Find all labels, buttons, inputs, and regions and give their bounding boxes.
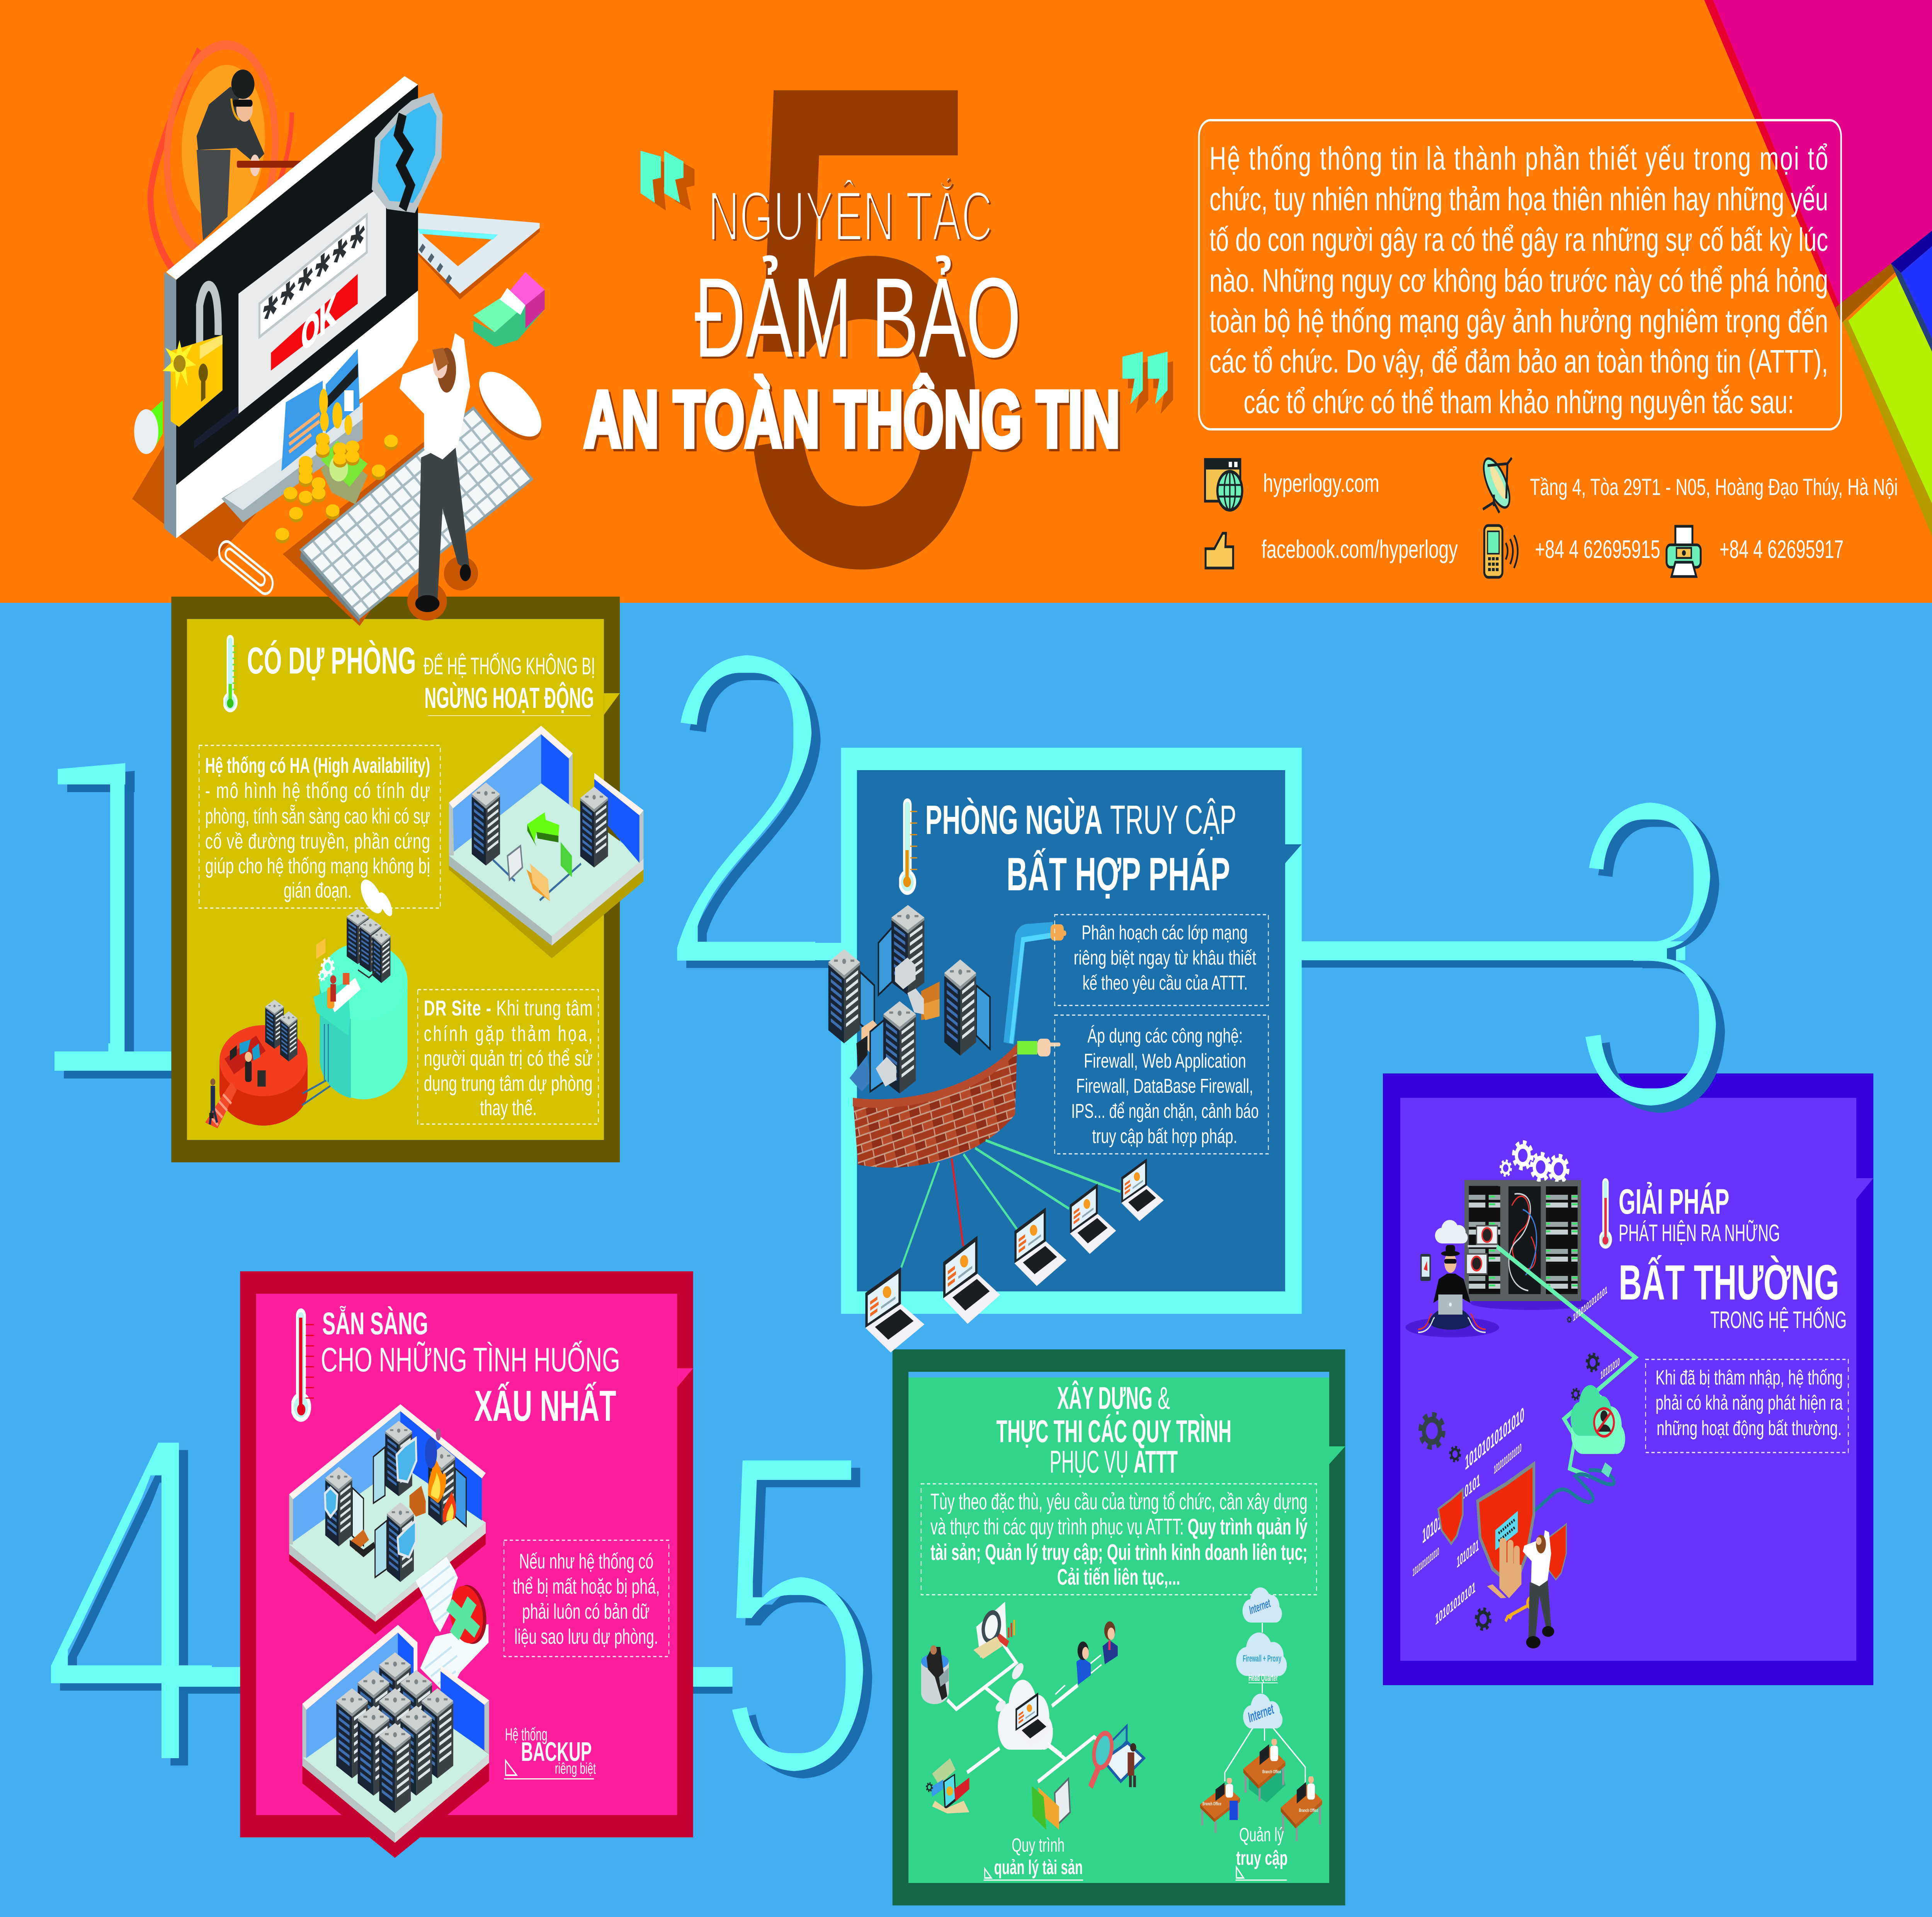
illustration: hacker	[1405, 1220, 1499, 1337]
branch 2: Branch Office	[1299, 1808, 1318, 1813]
label: head quarter: Head Quarter	[1248, 1673, 1278, 1683]
text block: description: Cải tiến liên tục,...	[1057, 1564, 1180, 1590]
title line 2: ĐẢM BẢO	[696, 256, 1023, 383]
thermometer	[1599, 1178, 1612, 1249]
number 4: 4	[38, 1330, 227, 1868]
text block: detection	[1646, 1359, 1848, 1453]
cloud: internet top: Internet	[1248, 1596, 1271, 1617]
heading	[321, 1306, 620, 1430]
network lines	[947, 1636, 1105, 1782]
illustration: connection line with cloud	[1497, 1247, 1635, 1526]
text block: HA: Hệ thống có HA (High Availability)	[205, 754, 430, 778]
header illustration: computer, hacker and worried man	[132, 35, 549, 626]
text block: network partition: Phân hoạch các lớp mạng	[1082, 921, 1248, 944]
icon: thumbs up	[1206, 533, 1233, 568]
heading: CÓ DỰ PHÒNG	[247, 640, 416, 682]
illustration: stairs with medical cross	[415, 1557, 492, 1689]
panel frame	[1383, 1073, 1873, 1685]
label: backup	[504, 1725, 596, 1779]
heading: PHÁT HIỆN RA NHỮNG	[1619, 1220, 1780, 1247]
shadows	[132, 340, 479, 626]
binary text	[1413, 1284, 1620, 1628]
binary text: 1010101010101	[1573, 1284, 1607, 1324]
thermometer	[898, 798, 917, 895]
illustration: laptops	[865, 1158, 1164, 1352]
shield left	[1438, 1489, 1463, 1544]
binary text: 10101	[1422, 1509, 1442, 1548]
label: access management	[1236, 1824, 1287, 1881]
illustration: shields and man	[1438, 1464, 1566, 1648]
text block: network partition: riêng biệt ngay từ khâu thiết	[1074, 946, 1257, 969]
illustration: server room on fire	[289, 1404, 486, 1635]
desk	[350, 1529, 369, 1551]
number 1	[54, 763, 172, 1078]
number 1: 1	[27, 666, 213, 1187]
text block: technologies: truy cập bất hợp pháp.	[1092, 1125, 1237, 1148]
illustration: hands	[1009, 924, 1066, 1056]
title line 2: ĐẢM BẢO	[694, 254, 1021, 381]
branch 1	[1200, 1777, 1240, 1833]
text block: HA: gián đoạn.	[284, 878, 352, 903]
heading: GIẢI PHÁP	[1619, 1182, 1729, 1221]
illustration: asset management network	[921, 1602, 1144, 1830]
heading: XẤU NHẤT	[474, 1382, 616, 1430]
text block: description: tài sản; Quản lý truy cập; Qui trình kinh doanh liên tục;	[930, 1539, 1308, 1565]
number 3: 3	[1567, 702, 1735, 1205]
text block: DR Site: chính gặp thảm họa,	[424, 1022, 593, 1046]
heading: SẴN SÀNG	[322, 1306, 428, 1341]
icon: web	[1205, 459, 1242, 510]
monitor: OK	[301, 286, 336, 361]
text block: HA: phòng, tính sẵn sàng cao khi có sự	[205, 804, 430, 828]
binary text: 10101010101010	[1465, 1402, 1524, 1475]
text block: description: Quy trình quản lý	[1188, 1514, 1308, 1539]
label: asset management: quản lý tài sản	[994, 1856, 1083, 1879]
panel frame	[893, 1349, 1345, 1905]
branch 1: Branch Office	[1202, 1802, 1221, 1806]
pencil	[134, 400, 163, 454]
heading: BẤT THƯỜNG	[1619, 1255, 1839, 1310]
ruler triangle	[418, 213, 540, 299]
heading: PHỤC VỤ	[1050, 1444, 1128, 1480]
text block: HA	[199, 745, 440, 908]
text block: notice: phải luôn có bản dữ	[522, 1600, 650, 1624]
text block: notice	[504, 1540, 669, 1657]
quote mark left	[641, 151, 694, 211]
binary text: 10101010	[1600, 1355, 1620, 1382]
connector 4 to 5	[691, 1667, 733, 1694]
binary text: 10101010101	[1435, 1578, 1475, 1628]
title line 1: NGUYÊN TẮC	[708, 177, 993, 255]
persons	[1048, 1621, 1118, 1754]
text block: detection: những hoạt động bất thường.	[1656, 1417, 1842, 1440]
intro text box	[1199, 120, 1841, 429]
cards and money	[281, 349, 367, 504]
text: fax number: +84 4 62695917	[1719, 535, 1844, 564]
illustration: gears	[1420, 1317, 1599, 1629]
text block: DR Site	[418, 990, 599, 1124]
binary text: 10101010101010	[1413, 1545, 1439, 1579]
heading: CHO NHỮNG TÌNH HUỐNG	[321, 1341, 620, 1379]
text: facebook: facebook.com/hyperlogy	[1262, 535, 1458, 564]
payment cluster	[926, 1758, 969, 1813]
header band	[0, 0, 1932, 603]
login card	[1495, 1511, 1518, 1550]
chart and magnifier	[973, 1602, 1015, 1659]
text block: HA: giúp cho hệ thống mạng không bị	[205, 854, 430, 878]
illustration: access management network	[1200, 1587, 1322, 1841]
thermometer	[291, 1308, 314, 1422]
number 1: 1	[18, 658, 203, 1179]
cloud: firewall	[1236, 1633, 1287, 1676]
heading: &	[1158, 1381, 1170, 1416]
text: address: Tầng 4, Tòa 29T1 - N05, Hoàng Đạo Thúy, Hà Nội	[1530, 475, 1898, 500]
intro text box: các tổ chức. Do vậy, để đảm bảo an toàn thông tin (ATTT),	[1209, 344, 1828, 379]
heading	[996, 1380, 1231, 1480]
hacker portal rings	[151, 35, 292, 268]
number 2: 2	[655, 552, 837, 1066]
illustration: brick wall firewall	[853, 1043, 1017, 1168]
intro text box: toàn bộ hệ thống mạng gây ảnh hưởng nghiêm trọng đến	[1209, 303, 1828, 339]
heading: ĐỂ HỆ THỐNG KHÔNG BỊ	[423, 653, 595, 680]
number 4: 4	[47, 1338, 236, 1875]
label: head quarter	[1248, 1673, 1278, 1683]
worried man	[400, 333, 478, 621]
label: asset management	[984, 1835, 1083, 1881]
man on cylinder	[921, 1645, 949, 1704]
branch 3: Branch Office	[1262, 1770, 1281, 1774]
illustration: isometric room with two racks	[449, 726, 643, 958]
shield	[372, 93, 442, 213]
mint cylinder	[313, 909, 408, 1099]
branch 2	[1281, 1776, 1322, 1841]
man	[1523, 1530, 1554, 1648]
panel frame	[171, 597, 620, 1162]
text block: DR Site: thay thế.	[480, 1096, 537, 1120]
eraser	[473, 272, 545, 347]
text block: technologies: IPS... để ngăn chặn, cảnh báo	[1071, 1100, 1259, 1123]
intro text box: Hệ thống thông tin là thành phần thiết yếu trong mọi tổ	[1209, 141, 1828, 177]
text block: detection: phải có khả năng phát hiện ra	[1655, 1391, 1843, 1414]
panel frame	[841, 748, 1302, 1314]
intro text box: nào. Những nguy cơ không báo trước này có thể phá hỏng	[1209, 263, 1828, 299]
panel 3: anomaly detection	[1383, 1073, 1873, 1685]
illustration: backup room	[302, 1625, 489, 1858]
illustration: server cabinet	[1464, 1142, 1592, 1310]
hand	[1487, 1538, 1521, 1598]
text block: description: và thực thi các quy trình phục vụ ATTT:	[930, 1514, 1184, 1539]
panel 2: illegal access prevention	[828, 748, 1302, 1352]
paper clip	[216, 538, 276, 597]
text block: technologies: Áp dụng các công nghệ:	[1087, 1024, 1243, 1047]
title line 1: NGUYÊN TẮC	[710, 179, 994, 257]
number 5: 5	[721, 1359, 890, 1881]
heading: NGỪNG HOẠT ĐỘNG	[424, 682, 594, 714]
connector 2 to 3	[1300, 941, 1685, 968]
title line 3: AN TOÀN THÔNG TIN	[586, 377, 1122, 466]
cloud: internet top	[1243, 1587, 1282, 1623]
label: asset management: Quy trình	[1012, 1835, 1065, 1856]
magnifier and laptop	[1090, 1723, 1144, 1787]
text block: HA: - mô hình hệ thống có tính dự	[205, 779, 430, 803]
binary text: 10101010101010	[1494, 1441, 1521, 1477]
heading	[925, 797, 1236, 900]
heading: PHÒNG NGỪA	[925, 797, 1102, 843]
flames	[425, 1428, 456, 1522]
text block: HA: cố về đường truyền, phần cứng	[205, 829, 430, 854]
coins	[276, 389, 398, 543]
illustration: server racks	[828, 905, 990, 1094]
heading	[247, 640, 595, 716]
monitor stand	[221, 402, 363, 522]
mouse	[472, 359, 549, 453]
text block: notice: thể bị mất hoặc bị phá,	[513, 1575, 660, 1599]
number 5: 5	[713, 1352, 881, 1874]
text block: detection: Khi đã bị thâm nhập, hệ thống	[1655, 1366, 1843, 1389]
intro text box: tố do con người gây ra có thể gây ra những sự cố bất kỳ lúc	[1209, 222, 1828, 258]
thermometer	[223, 635, 238, 712]
text block: DR Site: người quản trị có thể sử	[424, 1046, 593, 1071]
contact info	[1205, 453, 1898, 577]
folder	[1032, 1779, 1070, 1830]
illustration: connection lines	[901, 1140, 1121, 1267]
label: access management: Quản lý	[1239, 1824, 1284, 1846]
text block: DR Site: dụng trung tâm dự phòng	[424, 1072, 593, 1096]
label: backup: riêng biệt	[555, 1760, 596, 1777]
text block: notice: Nếu như hệ thống có	[519, 1550, 653, 1573]
heading: THỰC THI CÁC QUY TRÌNH	[996, 1414, 1231, 1449]
key	[1505, 1598, 1535, 1621]
monitor	[164, 76, 418, 538]
branch 3	[1243, 1738, 1286, 1803]
branch offices	[1200, 1738, 1322, 1841]
panel frame	[240, 1271, 693, 1837]
title	[584, 151, 1173, 466]
text block: technologies: Firewall, DataBase Firewall,	[1076, 1075, 1253, 1097]
boxes	[410, 1486, 426, 1517]
cloud: firewall: Firewall + Proxy	[1243, 1653, 1281, 1664]
shield right	[1545, 1524, 1566, 1580]
binary text: 10101	[1461, 1470, 1480, 1505]
heading: BẤT HỢP PHÁP	[1007, 847, 1230, 900]
text block: technologies	[1054, 1015, 1268, 1154]
shields	[325, 1438, 417, 1557]
icon: printer	[1667, 526, 1701, 577]
text: phone number: +84 4 62695915	[1535, 535, 1660, 564]
text block: network partition	[1054, 915, 1268, 1005]
heading	[1619, 1182, 1847, 1334]
padlock	[162, 286, 223, 427]
intro text box: các tổ chức có thể tham khảo những nguyên tắc sau:	[1243, 384, 1794, 420]
text block: technologies: Firewall, Web Application	[1084, 1050, 1246, 1072]
text: website: hyperlogy.com	[1263, 469, 1379, 498]
text block: description: Tùy theo đặc thù, yêu cầu của từng tổ chức, cần xây dựng	[930, 1489, 1308, 1514]
laptop on cloud	[998, 1680, 1053, 1750]
heading: TRONG HỆ THỐNG	[1710, 1307, 1847, 1334]
decorative corner shapes	[1704, 0, 1932, 536]
quote mark right	[1122, 352, 1173, 414]
heading: TRUY CẬP	[1110, 797, 1236, 843]
text block: DR Site: DR Site - Khi trung tâm	[424, 996, 593, 1021]
title line 3: AN TOÀN THÔNG TIN	[584, 374, 1120, 464]
text block: network partition: kế theo yêu cầu của ATTT.	[1082, 971, 1248, 994]
red cylinder	[205, 1000, 330, 1128]
label: backup: BACKUP	[521, 1737, 592, 1767]
icon: satellite dish	[1479, 453, 1515, 513]
number 3: 3	[1576, 709, 1744, 1212]
label: access management: truy cập	[1236, 1847, 1287, 1869]
panel 1: redundancy	[171, 597, 643, 1162]
cloud: internet bottom: Internet	[1247, 1700, 1275, 1726]
text block: description	[921, 1484, 1316, 1595]
clouds	[357, 874, 395, 919]
heading: ATTT	[1134, 1444, 1178, 1480]
icon: phone	[1484, 526, 1518, 577]
hacker	[197, 70, 326, 243]
intro text box: chức, tuy nhiên những thảm họa thiên nhiên hay những yếu	[1209, 181, 1828, 217]
shield big	[1478, 1464, 1534, 1588]
number 2: 2	[664, 560, 847, 1073]
illustration: DR site cylinders	[205, 874, 408, 1128]
heading: XÂY DỰNG	[1057, 1380, 1152, 1416]
keyboard	[300, 408, 532, 623]
text block: notice: liệu sao lưu dự phòng.	[514, 1625, 658, 1649]
panel 4: worst cases	[240, 1271, 693, 1858]
monitor: ******	[263, 208, 365, 352]
label: backup: Hệ thống	[505, 1725, 548, 1744]
panel 5: processes	[893, 1349, 1345, 1905]
binary text: 1010101	[1457, 1536, 1479, 1572]
